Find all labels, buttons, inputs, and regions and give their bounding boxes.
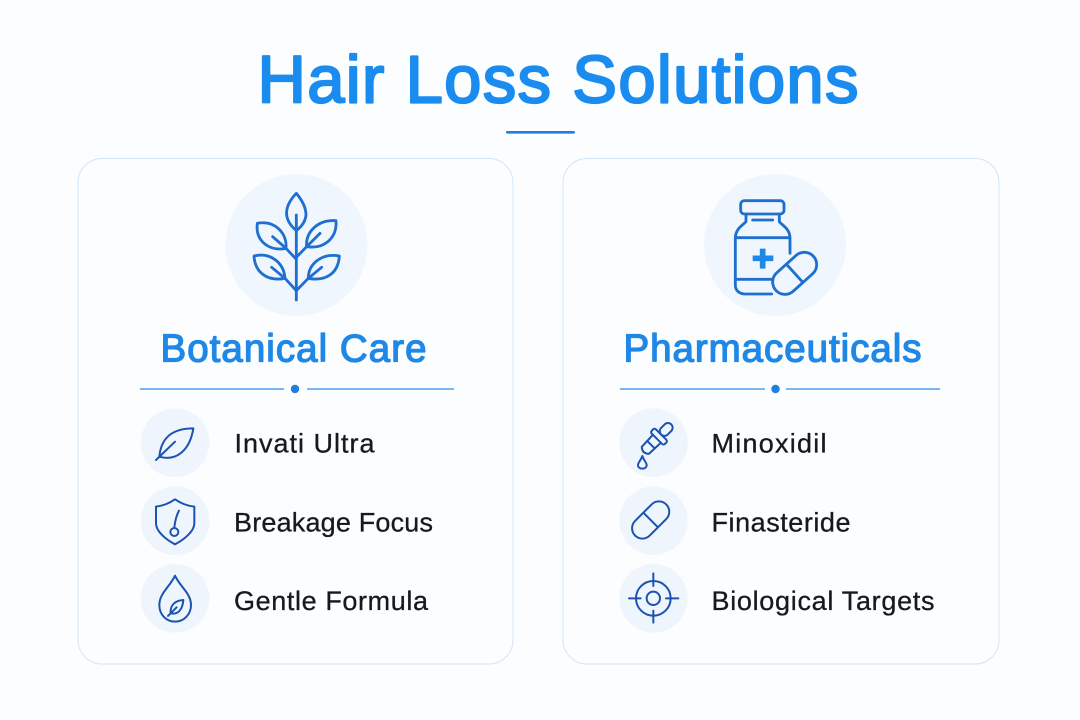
item: Finasteride [619, 486, 850, 555]
item: Gentle Formula: Gentle Formula [234, 586, 429, 616]
item: Biological Targets: Biological Targets [712, 586, 934, 616]
icon: dropper [637, 418, 678, 469]
item: Minoxidil: Minoxidil [712, 428, 826, 458]
icon: capsule [628, 497, 674, 543]
item: Finasteride: Finasteride [712, 508, 850, 538]
panel: botanical care [78, 158, 513, 664]
title: Hair Loss Solutions [258, 42, 858, 118]
title underline [506, 131, 575, 134]
item: Gentle Formula [141, 564, 429, 633]
item: Biological Targets [619, 564, 934, 633]
heading: botanical care: Botanical Care [160, 328, 426, 371]
item: Invati Ultra: Invati Ultra [234, 428, 375, 458]
icon: leaf [156, 428, 193, 460]
heading: pharmaceuticals: Pharmaceuticals [624, 328, 922, 371]
icon: target [629, 573, 678, 623]
icon: plant [226, 174, 368, 316]
divider [140, 385, 454, 393]
divider [620, 385, 940, 393]
icon: medicine bottle and pill [704, 174, 846, 316]
item: Breakage Focus: Breakage Focus [234, 508, 433, 538]
icon: drop with leaf [159, 576, 191, 622]
item: Invati Ultra [141, 408, 375, 477]
item: Minoxidil [619, 408, 826, 477]
panel: pharmaceuticals [563, 158, 999, 664]
icon: shield with hair [156, 499, 194, 544]
item: Breakage Focus [141, 486, 433, 555]
